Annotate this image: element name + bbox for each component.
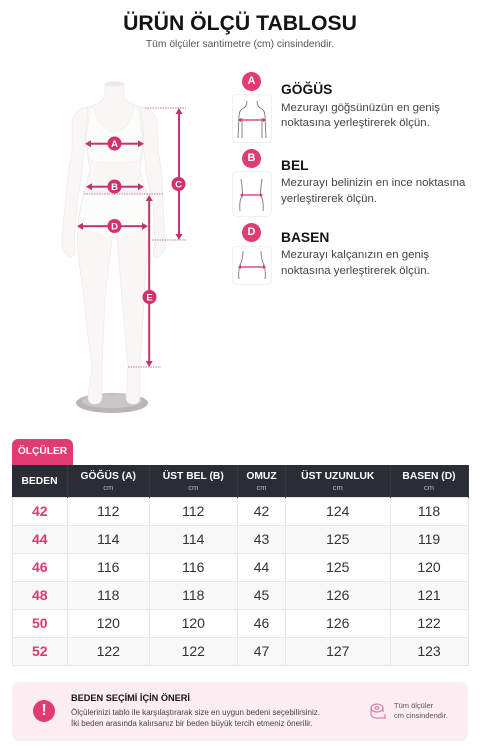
size table: 126 — [326, 614, 349, 630]
sports bra — [86, 108, 143, 163]
size table — [12, 465, 469, 666]
size table: 122 — [417, 614, 441, 630]
size table: 120 — [417, 558, 441, 574]
units note — [394, 701, 448, 720]
units note: cm cinsindendir. — [394, 711, 448, 720]
description: chest: noktasına yerleştirerek ölçün. — [281, 117, 430, 129]
size table: 119 — [418, 530, 440, 546]
table tab — [12, 439, 73, 465]
size table: 123 — [417, 642, 441, 658]
description: waist — [281, 177, 466, 204]
description: hips: Mezurayı kalçanızın en geniş — [281, 249, 429, 261]
size table: 44 — [254, 558, 269, 574]
measure A: A — [111, 139, 118, 150]
badge D: D — [248, 226, 255, 238]
size table: OMUZ — [246, 471, 277, 482]
size table: 48 — [32, 586, 48, 602]
advice text: Ölçülerinizi tablo ile karşılaştırarak size en uygun bedeni seçebilirsiniz. — [71, 708, 320, 717]
units note: Tüm ölçüler — [394, 701, 433, 710]
measure D: D — [111, 222, 118, 232]
size table: 112 — [97, 502, 119, 518]
size table: cm — [256, 483, 266, 492]
size table: cm — [188, 483, 198, 492]
advice text: İki beden arasında kalırsanız bir beden büyük tercih etmeniz önerilir. — [71, 719, 312, 728]
size table: 121 — [417, 586, 441, 602]
neck opening — [105, 82, 124, 86]
heading: waist: BEL — [281, 158, 309, 172]
measure C: C — [175, 180, 182, 190]
size table: 126 — [326, 586, 349, 602]
badge A: A — [248, 75, 255, 87]
mannequin base — [76, 393, 148, 413]
size table: 120 — [97, 614, 120, 630]
description: hips — [281, 249, 430, 276]
table tab: ÖLÇÜLER — [18, 446, 67, 457]
size table: 122 — [97, 642, 120, 658]
size table: 120 — [182, 614, 205, 630]
measure A — [85, 136, 144, 150]
size table: cm — [333, 483, 343, 492]
badge D — [242, 223, 261, 242]
size table: 52 — [32, 642, 48, 658]
size table: 125 — [326, 558, 349, 574]
badge B — [242, 149, 261, 168]
size table: 112 — [182, 502, 204, 518]
size table: 114 — [97, 530, 119, 546]
measure C — [172, 108, 186, 240]
size table: 118 — [97, 586, 119, 602]
heading: chest: GÖĞÜS — [281, 82, 332, 96]
briefs — [79, 194, 148, 238]
size table: BASEN (D) — [402, 471, 456, 482]
legs — [77, 190, 148, 404]
size table: 47 — [254, 642, 269, 658]
size table: BEDEN — [21, 476, 58, 487]
size table: cm — [424, 483, 434, 492]
size table: 125 — [326, 530, 349, 546]
measure D — [77, 219, 148, 233]
size table: ÜST BEL (B) — [163, 471, 224, 482]
size table: 44 — [32, 530, 48, 546]
size table: 127 — [326, 642, 349, 658]
advice heading: BEDEN SEÇİMİ İÇİN ÖNERİ — [71, 693, 190, 703]
description: waist: Mezurayı belinizin en ince noktasına — [281, 177, 465, 189]
size table: 45 — [254, 586, 269, 602]
mannequin body — [62, 82, 165, 404]
measure E — [142, 195, 156, 367]
size table: 46 — [32, 558, 48, 574]
icon: chest — [232, 94, 272, 143]
size table: 116 — [182, 558, 204, 574]
measure E: E — [146, 292, 153, 304]
size table: 42 — [254, 502, 269, 518]
icon: tape measure — [370, 704, 386, 718]
size table: GÖĞÜS (A) — [80, 471, 136, 482]
title: ÜRÜN ÖLÇÜ TABLOSU — [123, 12, 357, 35]
size table: 42 — [32, 502, 48, 518]
size table: 124 — [326, 502, 349, 518]
size table: 122 — [182, 642, 205, 658]
heading: hips: BASEN — [281, 230, 329, 244]
size table: 118 — [418, 502, 440, 518]
size table: 116 — [97, 558, 119, 574]
description: waist: yerleştirerek ölçün. — [281, 192, 377, 204]
size table: 118 — [182, 586, 204, 602]
description: chest — [281, 102, 440, 129]
description: hips: noktasına yerleştirerek ölçün. — [281, 264, 430, 276]
guide lines — [84, 108, 186, 367]
torso and neck — [84, 82, 146, 192]
advice text — [71, 708, 320, 728]
badge A — [242, 72, 261, 91]
subtitle: Tüm ölçüler santimetre (cm) cinsindendir. — [146, 39, 334, 50]
icon: warning: ! — [41, 702, 47, 719]
icon: warning — [33, 700, 55, 722]
measure B — [86, 180, 144, 194]
left arm — [62, 107, 88, 258]
size table: 43 — [254, 530, 269, 546]
size table: ÜST UZUNLUK — [301, 471, 374, 482]
size table: 46 — [254, 614, 269, 630]
icon: waist — [232, 171, 272, 217]
advice panel — [12, 682, 468, 741]
mannequin diagram — [62, 82, 186, 413]
size table: 114 — [182, 530, 204, 546]
badge B: B — [248, 152, 255, 164]
icon: hips — [232, 246, 272, 285]
size table: 50 — [32, 614, 48, 630]
right arm — [141, 107, 165, 258]
description: chest: Mezurayı göğsünüzün en geniş — [281, 102, 440, 114]
size table: cm — [103, 483, 113, 492]
measure B: B — [111, 182, 118, 193]
